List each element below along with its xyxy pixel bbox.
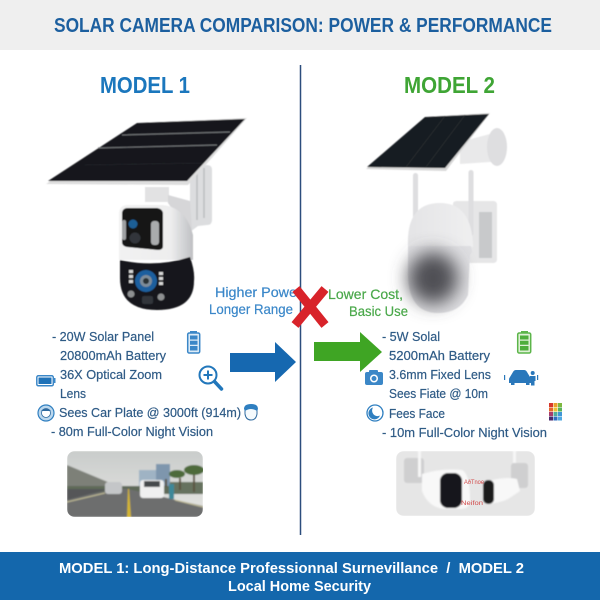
spec list: model 2: 5200mAh Battery [389, 349, 491, 363]
photo: white bullet cameras [396, 451, 535, 516]
spec list: model 1: - 20W Solar Panel [52, 330, 154, 344]
label: higher power: Higher Powe [215, 284, 297, 300]
spec list: model 1 [51, 330, 241, 439]
icon: red cross [295, 289, 325, 325]
footer banner [0, 552, 600, 600]
icon: face badge [38, 405, 54, 421]
spec list: model 2: 3.6mm Fixed Lens [389, 368, 491, 382]
spec list: model 2: Sees Fiate @ 10m [389, 387, 488, 401]
spec list: model 2: - 10m Full-Color Night Vision [382, 426, 547, 440]
photo: white bullet cameras: Neifon [461, 500, 483, 507]
heading: model 2: MODEL 2 [404, 72, 495, 98]
arrow: blue [230, 342, 296, 382]
blurred camera lens [408, 252, 458, 304]
icon: horizontal battery [37, 376, 56, 386]
center divider [300, 65, 302, 535]
footer banner: MODEL 1: Long-Distance Professionnal Surnevillance / MODEL 2 [59, 560, 524, 577]
icon: car and person [504, 370, 538, 386]
label: lower cost: Basic Use [349, 303, 408, 319]
spec list: model 2: Fees Face [389, 407, 445, 421]
product photo: model 2 camera [366, 113, 507, 313]
label: higher power: Longer Range [209, 301, 293, 317]
label: higher power [209, 284, 297, 317]
icon: face outline [244, 404, 258, 420]
icon: moon [367, 405, 383, 421]
photo: road with cars [67, 451, 204, 517]
title banner [0, 0, 600, 50]
icon: vertical battery green [518, 331, 531, 353]
icon: magnifier [200, 366, 222, 389]
spec list: model 1: - 80m Full-Color Night Vision [51, 425, 213, 439]
heading: model 1: MODEL 1 [100, 72, 190, 98]
icon: camera [365, 370, 383, 385]
icon: colour grid [549, 403, 562, 420]
label: lower cost: Lower Cost, [328, 286, 403, 302]
product photo: model 1 camera [46, 118, 247, 310]
spec list: model 1: Sees Car Plate @ 3000ft (914m) [59, 406, 241, 420]
spec list: model 1: 20800mAh Battery [60, 349, 167, 363]
spec list: model 2 [382, 330, 547, 440]
label: lower cost [328, 286, 408, 319]
arrow: green [314, 332, 382, 372]
photo: white bullet cameras: AðTnoe [464, 478, 484, 486]
footer banner: Local Home Security [228, 578, 372, 595]
spec list: model 1: 36X Optical Zoom [60, 368, 162, 382]
spec list: model 1: Lens [60, 387, 86, 401]
icon: vertical battery blue [188, 331, 200, 353]
spec list: model 2: - 5W Solal [382, 330, 440, 344]
